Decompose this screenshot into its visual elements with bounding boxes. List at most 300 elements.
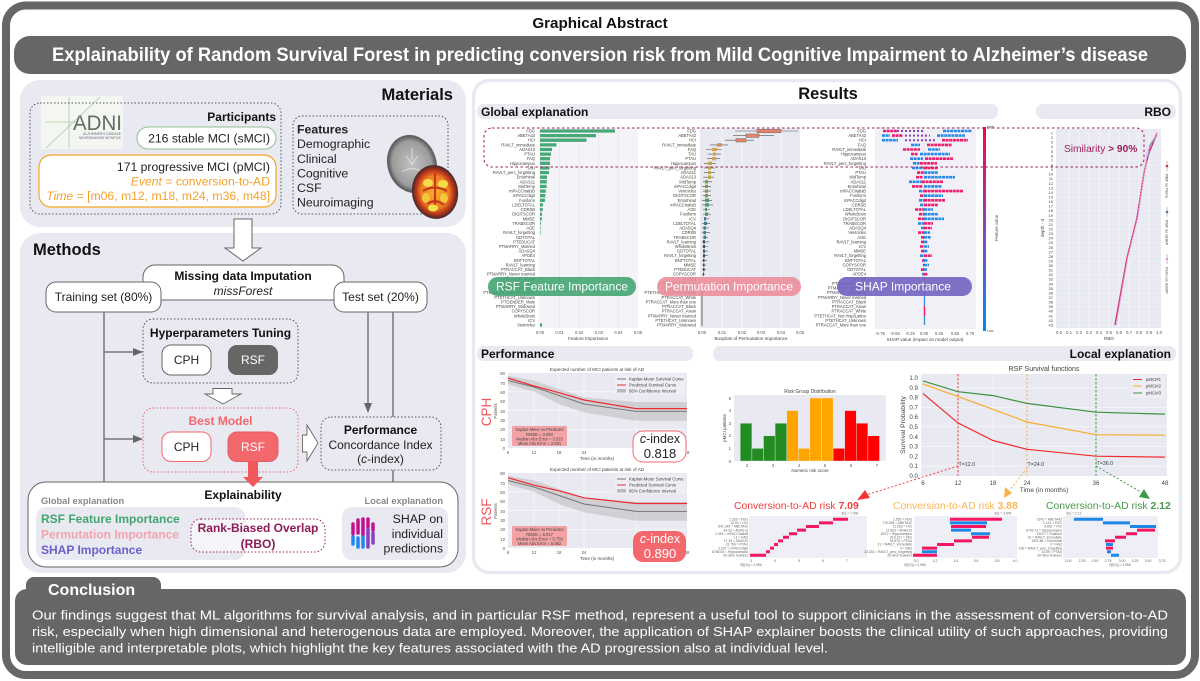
box: training set: Training set (80%) <box>55 290 152 304</box>
box: explainability: Local explanation <box>364 496 443 506</box>
box: best model: CPH <box>174 440 199 454</box>
progressive MCI box: Event = conversion-to-AD <box>131 174 270 188</box>
chart: SHAP waterfall patient 1: E[f(X)] = 2.966 <box>740 563 762 567</box>
chart: RBO: 32 <box>1049 272 1054 277</box>
stable MCI box: 216 stable MCI (sMCI) <box>148 132 270 146</box>
label pill: permutation importance <box>657 277 801 296</box>
chart: RBO: 18 <box>1049 208 1054 213</box>
chart: RBO: 4 <box>1051 144 1054 149</box>
label pill: permutation importance: Permutation Importance <box>665 280 793 294</box>
chart: CPH survival curve: 24 <box>582 450 587 455</box>
chart: SHAP importance: Entorhinal <box>848 184 866 189</box>
chart: RSF survival curve: 60 <box>500 490 506 495</box>
box: features: CSF <box>297 181 322 195</box>
chart: permutation importance: mPACCdigit <box>674 184 697 189</box>
chart: SHAP waterfall patient 3: 2.75 <box>1105 559 1111 563</box>
heading: conversion risk 2.12: Conversion-to-AD risk 2.12 <box>1046 501 1171 512</box>
chart: RSF survival functions: 0.1 <box>909 463 919 470</box>
chart: permutation importance: ICV <box>689 216 696 221</box>
chart: RSF feature importance <box>483 128 643 341</box>
chart: CPH survival curve: 80 <box>500 371 506 376</box>
chart: RBO: 38 <box>1049 300 1054 305</box>
chart: CPH survival curve: 0 <box>503 446 506 451</box>
chart: RBO: 15 <box>1049 194 1054 199</box>
chart: RBO: 0.6 <box>1116 330 1123 335</box>
chart: permutation importance: ADAS11 <box>681 170 697 175</box>
box: hyperparameters tuning: Hyperparameters Tuning <box>150 326 291 340</box>
chart: permutation importance: TRABSCOR <box>673 235 696 240</box>
chart: RSF feature importance: 0.03 <box>595 330 604 335</box>
chart: RSF survival curve: Mean Abs Error = 5.062 <box>518 541 562 546</box>
chart: RBO: 14 <box>1049 190 1054 195</box>
chart: RSF survival functions: RSF Survival functions <box>1009 366 1080 373</box>
chart: RSF survival curve: 18 <box>557 550 562 555</box>
chart: RBO: 9 <box>1051 167 1054 172</box>
c-index badge CPH <box>633 431 686 462</box>
chart: SHAP waterfall patient 1: 641.345 = ABETA42 <box>718 525 748 529</box>
chart: permutation importance: 0.02 <box>738 330 747 335</box>
RBO legend: RSF vs SHAP <box>1165 220 1170 245</box>
chart: CPH survival curve <box>479 367 690 462</box>
chart: RSF feature importance: MidTemp <box>518 184 536 189</box>
chart: permutation importance: Entorhinal <box>678 198 696 203</box>
chart: CPH survival curve: 60 <box>500 390 506 395</box>
sub-heading: local explanation: Local explanation <box>1070 347 1171 361</box>
chart: RBO: 0.4 <box>1096 330 1103 335</box>
chart: RSF survival functions: T=12.0 <box>958 462 975 468</box>
chart: SHAP waterfall patient 3 <box>1019 512 1165 567</box>
callout: top features dashed highlight <box>484 128 1144 167</box>
chart: RSF survival functions: 1.0 <box>909 375 919 382</box>
chart: RBO: 2 <box>1051 135 1054 140</box>
box: features: Clinical <box>297 152 337 166</box>
chart: RSF survival functions: 48 <box>1162 480 1169 487</box>
box: test set: Test set (20%) <box>342 290 419 304</box>
chart: SHAP importance: 0.75 <box>966 331 975 336</box>
chart: RBO: 5 <box>1051 149 1054 154</box>
chart: CPH survival curve: 95% Confidence Interval <box>629 388 676 394</box>
chart: RSF feature importance: APOE4 <box>521 253 536 258</box>
chart: RSF feature importance: RAVLT_immediate <box>501 142 536 147</box>
chart: SHAP waterfall patient 1: 6 <box>822 559 824 563</box>
chart: SHAP waterfall patient 3: 2.00 <box>1065 559 1071 563</box>
chart: SHAP waterfall patient 2 <box>864 512 1017 567</box>
chart: SHAP waterfall patient 1: 10.93 = HCI <box>730 521 748 525</box>
chart: RSF survival curve: 0 <box>503 546 506 551</box>
chart: RSF feature importance: COPYSCOR <box>512 309 535 314</box>
chart: RSF feature importance: 0.01 <box>555 330 564 335</box>
chart: SHAP importance: ADASQ4 <box>849 226 867 231</box>
chart: RBO: 0.9 <box>1146 330 1153 335</box>
chart: SHAP waterfall patient 2: 21 = RAVLT_immediate <box>877 543 912 547</box>
chart: RSF survival curve: 30 <box>500 518 506 523</box>
chart: SHAP importance: PTRACCAT_Black <box>832 299 867 304</box>
chart: permutation importance: RAVLT_immediate <box>662 142 697 147</box>
chart: permutation importance: 0.00 <box>698 330 707 335</box>
chart: permutation importance: WholeBrain <box>675 244 697 249</box>
chart: permutation importance: PTMARRY_Never married <box>648 313 697 318</box>
chart: SHAP importance: GDTOTAL <box>847 267 867 272</box>
chart: CPH survival curve: 10 <box>500 437 506 442</box>
label pill: SHAP importance: SHAP Importance <box>855 280 951 294</box>
chart: risk group distribution: 1 <box>729 446 732 451</box>
icon: ADNI logo: NEUROIMAGING INITIATIVE <box>79 136 121 140</box>
chart: permutation importance: Hippocampus <box>671 161 696 166</box>
chart: permutation importance: HCI <box>689 138 696 143</box>
chart: RSF feature importance: PTRACCAT_Black <box>501 267 536 272</box>
chart: risk group distribution: 2 <box>746 463 749 468</box>
chart: CPH survival curve: 20 <box>500 427 506 432</box>
icon: ADNI logo: ALZHEIMER'S DISEASE <box>83 132 122 136</box>
chart: SHAP waterfall patient 3: 3.50 <box>1145 559 1151 563</box>
chart: RSF feature importance: mPACCtrailsB <box>509 189 535 194</box>
chart: permutation importance: 0.04 <box>777 330 786 335</box>
chart: RSF survival functions: 0.9 <box>909 385 919 392</box>
chart: SHAP importance: -0.50 <box>890 331 901 336</box>
box: participants: Participants <box>207 110 276 124</box>
label pill: SHAP importance <box>837 277 972 296</box>
chart: SHAP waterfall patient 1: 17.33 = ADAS11 <box>724 539 748 543</box>
arrow: T=12 to red waterfall <box>857 466 958 500</box>
progressive MCI box <box>39 155 276 207</box>
chart: SHAP waterfall patient 1: 5 <box>798 559 800 563</box>
panel: conclusion <box>15 577 1186 665</box>
chart: SHAP importance: -0.25 <box>905 331 916 336</box>
chart: CPH survival curve: RMSE = 3.080 <box>526 432 554 437</box>
chart: RBO: 7 <box>1051 158 1054 163</box>
chart: permutation importance: 0.01 <box>718 330 727 335</box>
chart: RBO: 41 <box>1049 313 1054 318</box>
chart: permutation importance: FAQ <box>688 147 696 152</box>
chart: SHAP importance: Ventricles <box>848 230 866 235</box>
chart: RBO: 0.5 <box>1106 330 1113 335</box>
chart: RBO: 36 <box>1049 290 1054 295</box>
chart: permutation importance: LDELTOTAL <box>673 221 697 226</box>
chart: permutation importance: Boxplots of Permutation Importance <box>714 336 788 341</box>
box: missing data imputation: missForest <box>214 284 273 298</box>
chart: permutation importance: BNTTOTAL <box>675 258 697 263</box>
chart: RSF feature importance: PTGENDER_Male <box>501 299 536 304</box>
chart: SHAP waterfall patient 1: 34.33 = ADAS13 <box>724 528 748 532</box>
chart: RSF feature importance: 0.05 <box>634 330 643 335</box>
progressive MCI box: 171 progressive MCI (pMCI) <box>117 160 270 174</box>
chart: RSF feature importance: RAVLT_perc_forgetting <box>493 170 536 175</box>
chart: RSF feature importance: Hippocampus <box>510 161 535 166</box>
chart: permutation importance: ADAS13 <box>680 175 697 180</box>
chart: RSF survival functions: 0.3 <box>909 444 919 450</box>
chart: SHAP waterfall patient 3: E[f(X)] = 2.966 <box>1109 563 1131 567</box>
box: best model: RSF <box>241 440 265 454</box>
chart: RBO: 26 <box>1049 245 1054 250</box>
chart: SHAP importance: 0.25 <box>935 331 944 336</box>
chart: RSF survival functions: 0.0 <box>909 473 919 480</box>
box: missing data imputation <box>143 265 344 300</box>
chart: permutation importance: AGE <box>687 207 696 212</box>
title banner <box>14 36 1186 74</box>
chart: CPH survival curve: 50 <box>500 399 506 404</box>
global explanation list: Permutation Importance <box>41 528 179 542</box>
arrow: T=24 to orange waterfall <box>1004 468 1027 498</box>
chart: SHAP waterfall patient 2: 33.333 = RAVLT_perc_forgetting <box>864 550 912 554</box>
chart: RBO: depth - d <box>1040 218 1045 237</box>
chart: SHAP waterfall patient 1: 33 other features <box>723 554 748 558</box>
chart: RBO: 0.8 <box>1136 330 1143 335</box>
chart: SHAP importance: LDELTOTAL <box>843 207 867 212</box>
chart: RSF survival functions: 0.7 <box>909 404 919 412</box>
chart: SHAP waterfall patient 3: 1670 = ABETA42 <box>1037 518 1062 522</box>
global explanation list <box>36 507 245 560</box>
chart: RSF survival functions: 0.6 <box>909 414 919 421</box>
chart: SHAP importance: FDG <box>857 128 866 134</box>
chart: RSF feature importance: CDRSB <box>521 207 535 212</box>
chart: SHAP waterfall patient 3: 3.25 <box>1132 559 1138 563</box>
chart: RBO: 37 <box>1049 295 1054 300</box>
chart: SHAP importance: PTETHCAT_Unknown <box>825 318 867 323</box>
heading: conclusion: Conclusion <box>48 582 135 599</box>
chart: SHAP waterfall patient 3: 2.50 <box>1092 559 1098 563</box>
chart: risk group distribution: 5 <box>729 396 732 401</box>
chart: risk group distribution: pMCI patients <box>722 413 727 442</box>
chart: RSF survival curve: 10 <box>500 537 506 542</box>
chart: permutation importance: PTMARRY_Widowed <box>657 323 697 328</box>
chart: SHAP waterfall patient 2: 6971 = Hippocampus <box>881 532 912 536</box>
box: missing data imputation: Missing data Imputation <box>174 269 312 283</box>
chart: RBO: 22 <box>1049 226 1054 231</box>
chart: risk group distribution: 5 <box>824 463 827 468</box>
chart: RSF feature importance: DIGITSCOR <box>512 212 535 217</box>
arrows: test set connections <box>368 312 393 494</box>
colour bar: feature value: Low <box>987 329 994 333</box>
chart: RSF survival functions: 6 <box>921 480 925 487</box>
icon: ADNI logo: ADNI <box>73 112 122 135</box>
chart: permutation importance: Fusiform <box>680 212 697 217</box>
chart: SHAP waterfall patient 3: f(x) = 2.12 <box>1067 512 1082 516</box>
chart: SHAP waterfall patient 1: 1.333 = FDG <box>729 518 748 522</box>
chart: SHAP waterfall patient 2: 3.0 <box>914 559 918 563</box>
c-index badge RSF: 0.890 <box>644 546 676 561</box>
chart: RSF survival curve: 36 <box>634 550 639 555</box>
chart: SHAP importance: -0.75 <box>875 331 886 336</box>
local explanation box: SHAP on <box>393 512 443 526</box>
chart: permutation importance: PTGENDER_Male <box>662 286 697 291</box>
chart: SHAP waterfall patient 1: 3 <box>750 559 752 563</box>
label pill: RSF feature importance: RSF Feature Importance <box>496 280 628 294</box>
colour bar: feature value <box>983 125 999 333</box>
chart: RBO: 12 <box>1049 181 1054 186</box>
chart: RSF survival curve: Kaplan-Meier Survival Curve <box>629 476 684 482</box>
chart: RSF feature importance: PTMARRY_Divorced <box>497 286 536 291</box>
chart: RSF survival curve: Patients <box>493 503 498 519</box>
chart: SHAP importance: PTMARRY_Divorced <box>828 286 867 291</box>
chart: SHAP waterfall patient 3: 1.141 = FDG <box>1043 521 1062 525</box>
chart: RSF feature importance: PTETHCAT_Not Hisp/Latino <box>483 290 536 295</box>
chart: SHAP importance: ADAS13 <box>850 156 867 161</box>
chart: SHAP importance: 0.00 <box>920 331 929 336</box>
chart: risk group distribution: 7 <box>876 463 879 468</box>
chart: SHAP importance: 0.50 <box>951 331 960 336</box>
chart: SHAP importance: Fusiform <box>850 193 867 198</box>
chart: SHAP waterfall patient 2: 3.6 <box>974 559 978 563</box>
chart: RBO: 28 <box>1049 254 1054 259</box>
chart: RBO: 20 <box>1049 217 1054 222</box>
box: explainability <box>28 482 458 567</box>
chart: CPH survival curve: Patients <box>493 403 498 419</box>
chart: RBO: 6 <box>1051 153 1054 158</box>
chart: SHAP waterfall patient 2: 319.121 = TAU <box>890 536 913 540</box>
chart: SHAP importance: WholeBrain <box>845 212 867 217</box>
chart: RSF survival functions: 12 <box>955 480 962 487</box>
chart: SHAP waterfall patient 2: 776.095 = ABETA42 <box>882 521 912 525</box>
title banner: Explainability of Random Survival Forest in predicting conversion risk from Mild Cognitive Impairment to Alzheimer’s disease <box>52 45 1148 66</box>
chart: RSF feature importance: 0.02 <box>575 330 584 335</box>
chart: RBO: 0.2 <box>1076 330 1083 335</box>
c-index badge CPH: c-index <box>640 432 681 446</box>
chart: RBO: 35 <box>1049 286 1054 291</box>
box: features <box>293 116 448 214</box>
box: hyperparameters tuning <box>143 319 298 383</box>
chart: RSF feature importance: ABETA42 <box>517 133 536 138</box>
callout: rank-biased overlap: Rank-Biased Overlap <box>198 521 318 535</box>
chart: permutation importance: MMSE <box>684 262 696 267</box>
chart: RSF survival curve: 50 <box>500 499 506 504</box>
chart: RSF feature importance: PTAU <box>524 152 535 157</box>
chart: RSF survival curve <box>479 467 690 562</box>
arrow: T=36 to green waterfall <box>1096 466 1150 499</box>
chart: SHAP importance: MMSE <box>854 249 866 254</box>
chart: RSF feature importance: TAU <box>527 165 535 170</box>
box: performance: (c-index) <box>357 452 404 466</box>
chart: RSF feature importance: RAVLT_learning <box>506 262 536 267</box>
chart: SHAP importance: DIGITSCOR <box>843 216 866 221</box>
panel: results <box>474 80 1180 572</box>
chart: RBO: 21 <box>1049 222 1054 227</box>
chart: RSF feature importance: WholeBrain <box>514 313 536 318</box>
heading: methods: Methods <box>33 241 101 259</box>
chart: RBO: 42 <box>1049 318 1054 323</box>
chart: RBO: 0.0 <box>1056 330 1063 335</box>
box: best model <box>143 408 298 472</box>
chart: permutation importance: PTETHCAT_Not Hisp/Latino <box>644 290 697 295</box>
chart: RBO: 25 <box>1049 240 1054 245</box>
chart: CPH survival curve: Mean Abs Error = 2.831 <box>518 441 562 446</box>
chart: SHAP waterfall patient 3: 2.25 <box>1079 559 1085 563</box>
chart: SHAP waterfall patient 1: 2.451 = mPACCtrailsB <box>715 532 749 536</box>
box: participants <box>30 103 281 214</box>
box: best model: Best Model <box>188 414 253 428</box>
chart: RSF feature importance: ADAS13 <box>519 147 536 152</box>
box: training set <box>46 282 161 312</box>
chart: SHAP waterfall patient 3: 100 = RAVLT_perc_forgetting <box>1019 546 1062 550</box>
chart: RBO: 1 <box>1051 130 1054 136</box>
chart: RSF survival functions: Time (in months) <box>1020 487 1068 494</box>
chart: SHAP importance: FAQ <box>858 142 866 147</box>
chart: RBO: 0.1 <box>1066 330 1073 335</box>
chart: RSF survival functions: 0.4 <box>909 434 919 441</box>
chart: RSF survival curve: Time (in months) <box>580 556 615 561</box>
chart: SHAP waterfall patient 2: 34.876 = PTAU <box>890 539 913 543</box>
chart: RBO: 24 <box>1049 236 1054 241</box>
chart: risk group distribution: Risk Group Distribution <box>784 389 836 395</box>
chart: RSF survival curve: 80 <box>500 471 506 476</box>
chart: RSF survival functions: 0.2 <box>909 454 919 460</box>
chart: RSF feature importance: ADASQ4 <box>518 249 536 254</box>
chart: RSF feature importance: ICV <box>528 318 535 323</box>
heading: conversion risk 3.88: Conversion-to-AD risk 3.88 <box>893 501 1018 512</box>
chart: SHAP importance: PTRACCAT_More than one <box>816 323 867 328</box>
chart: permutation importance: ABETA42 <box>678 133 697 138</box>
sub-heading: performance: Performance <box>481 347 555 361</box>
chart: RBO: 0.7 <box>1126 330 1133 335</box>
global explanation list: SHAP Importance <box>41 543 142 557</box>
chart: SHAP importance: AGE <box>857 235 866 240</box>
chart: RSF survival functions: 24 <box>1024 480 1031 487</box>
chart: SHAP waterfall patient 3: 8793.73 = Hippocampus <box>1026 528 1062 532</box>
chart: RSF feature importance: Fusiform <box>519 198 536 203</box>
chart: RBO: 3 <box>1051 140 1054 145</box>
chart: SHAP waterfall patient 2: E[f(X)] = 2.966 <box>904 563 926 567</box>
chart: RSF feature importance: FAQ <box>527 156 535 161</box>
chart: SHAP importance: mPACCdigit <box>844 198 867 203</box>
chart: RSF feature importance: PTMARRY_Widowed <box>496 304 536 309</box>
chart: RSF feature importance: GDTOTAL <box>516 235 536 240</box>
chart: RBO: 39 <box>1049 304 1054 309</box>
chart: RSF survival functions: 0.8 <box>909 394 919 402</box>
chart: RSF feature importance: ADAS11 <box>520 179 536 184</box>
sub-heading: performance <box>477 346 693 361</box>
chart: SHAP waterfall patient 3: 0 = FAQ <box>1050 543 1062 547</box>
chart: permutation importance: FDG <box>687 128 696 134</box>
chart: SHAP waterfall patient 3: 3.75 <box>1159 559 1165 563</box>
heading: conversion risk 7.09: Conversion-to-AD risk 7.09 <box>734 501 859 512</box>
chart: risk group distribution: 3 <box>772 463 775 468</box>
chart: SHAP waterfall patient 3: 24.59 = PTAU <box>1041 550 1063 554</box>
chart: RSF feature importance: HCI <box>528 138 535 143</box>
chart: risk group distribution: 4 <box>729 408 732 413</box>
chart: RSF survival curve: 95% Confidence Interval <box>629 488 676 494</box>
chart: RSF feature importance: Entorhinal <box>517 175 535 180</box>
sub-heading: RBO: RBO <box>1144 105 1171 119</box>
chart: RSF survival curve: 20 <box>500 527 506 532</box>
chart: SHAP waterfall patient 1: 4 <box>774 559 776 563</box>
chart: SHAP waterfall patient 1: 7 <box>846 559 848 563</box>
chart: RBO: 34 <box>1049 281 1054 286</box>
icon: SHAP logo <box>353 519 373 547</box>
chart: risk group distribution: 6 <box>850 463 853 468</box>
chart: SHAP waterfall patient 1: 2.167 = mPACCdigit <box>718 546 748 550</box>
global explanation list: RSF Feature Importance <box>41 512 180 526</box>
chart: risk group distribution: 2 <box>729 433 732 438</box>
chart: RSF feature importance: RAVLT_forgetting <box>503 230 536 235</box>
conclusion text: intelligible and interpretable plots, which highlight the key features associated with the AD progression also at individual level. <box>32 640 828 656</box>
progressive MCI box: Time = [m06, m12, m18, m24, m36, m48] <box>46 189 270 203</box>
chart: SHAP waterfall patient 2: 3.4 <box>954 559 958 563</box>
chart: SHAP waterfall patient 1: 1.1 = FAQ <box>733 536 748 540</box>
chart: RSF feature importance: PTETHCAT_Unknown <box>494 295 536 300</box>
chart: RBO: RBO <box>1104 336 1114 341</box>
chart: permutation importance: mPACCtrailsB <box>670 202 696 207</box>
chart: RSF survival curve: RSF <box>479 498 494 526</box>
icon: MRI brain <box>380 129 444 199</box>
chart: RSF survival functions: 36 <box>1093 480 1100 487</box>
chart: SHAP importance: BNTTOTAL <box>845 258 867 263</box>
chart: permutation importance: RAVLT_perc_forgetting <box>654 165 697 170</box>
sub-heading: RBO <box>1036 104 1176 119</box>
chart: SHAP importance: PTMARRY_Never married <box>818 295 867 300</box>
chart: RSF survival curve: RMSE = 5.017 <box>526 532 554 537</box>
chart: risk group distribution: 4 <box>798 463 801 468</box>
chart: SHAP importance: HCI <box>859 138 866 143</box>
chart: RSF feature importance: PTMARRY_Never married <box>487 272 536 277</box>
